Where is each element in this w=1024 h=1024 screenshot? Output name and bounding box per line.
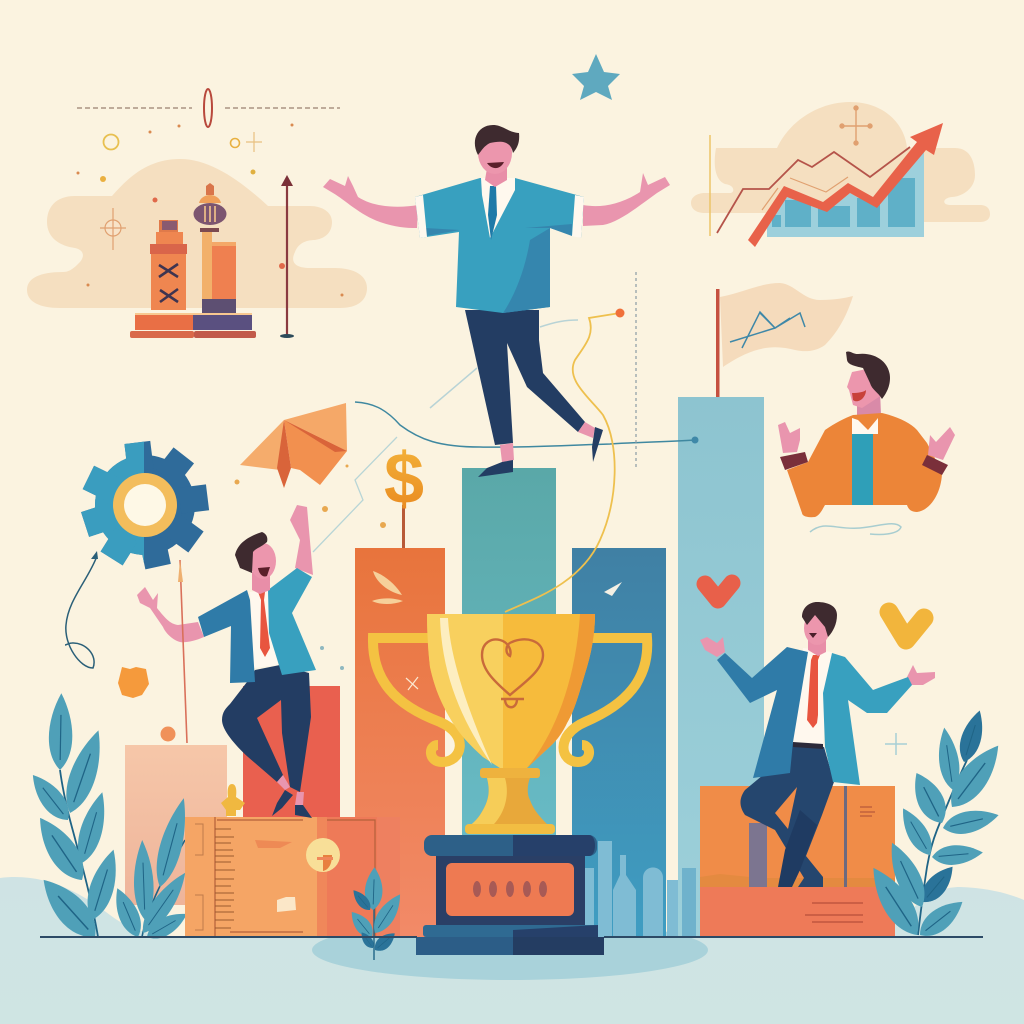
cloud backdrop [27, 159, 367, 308]
cuffs [780, 452, 948, 475]
panel: bar columns [125, 397, 764, 937]
leg gap [775, 787, 797, 829]
mouth [487, 162, 504, 168]
jacket left [198, 590, 255, 683]
tie [488, 186, 497, 240]
cup highlight [440, 618, 492, 765]
figure: right man [700, 602, 935, 887]
dashed line and ring [77, 107, 340, 109]
handles [373, 638, 460, 762]
box: right stack [700, 786, 895, 937]
head [478, 132, 512, 174]
bar: red [243, 686, 340, 821]
heart emblem [482, 639, 543, 707]
main arrow [748, 123, 943, 247]
crosshair [840, 106, 872, 145]
jacket right [268, 568, 316, 675]
bar marks [372, 571, 403, 604]
head [804, 611, 830, 645]
tie [258, 592, 270, 657]
raised arm [290, 505, 313, 575]
panel: chess towers [27, 89, 367, 338]
shirt shading [503, 224, 572, 313]
dots [76, 124, 344, 296]
star [572, 54, 620, 100]
plaque [446, 863, 574, 916]
hair [475, 125, 519, 155]
neck [252, 572, 270, 594]
badge small flower [160, 726, 176, 742]
vertical axis [709, 135, 711, 236]
jacket right [823, 653, 912, 785]
socks [277, 775, 304, 805]
gear [81, 441, 209, 569]
small sparkle [885, 733, 907, 755]
chart area [767, 150, 924, 237]
badge [118, 667, 149, 698]
legs [740, 743, 834, 887]
ground line [40, 936, 417, 938]
bar: orange [355, 548, 445, 937]
stem collar [480, 768, 540, 778]
pedestal top [424, 835, 597, 856]
hearts [705, 583, 924, 640]
jacket [787, 413, 942, 517]
inner shirt [852, 434, 873, 505]
cup [427, 614, 595, 768]
legs [222, 665, 311, 792]
hands [778, 422, 955, 460]
tie [807, 655, 820, 728]
hands [700, 637, 935, 685]
plant: left large [24, 693, 125, 947]
neck [857, 390, 881, 428]
bar: light blue [678, 397, 764, 937]
ground line right [604, 936, 983, 938]
thin trend lines [717, 147, 910, 233]
shoes [478, 427, 603, 477]
paper plane [240, 403, 347, 488]
shirt [793, 648, 832, 745]
base [135, 314, 193, 330]
target mark [100, 208, 126, 250]
shoes [272, 790, 312, 818]
stem [465, 778, 555, 832]
hair [846, 351, 890, 399]
squiggle [810, 524, 901, 534]
arms [323, 173, 670, 228]
cup shade [527, 614, 595, 768]
curved arrow under gear [65, 551, 98, 668]
figure: top man on teal bar [323, 125, 670, 477]
panel: growth chart [691, 102, 990, 247]
arrow [286, 182, 288, 335]
plant: small left [108, 795, 194, 945]
plant: right large [862, 708, 1009, 943]
back arm [137, 587, 204, 642]
legs [465, 310, 585, 445]
cuffs [415, 195, 584, 238]
skyline [585, 841, 696, 937]
plant: center small [346, 867, 407, 960]
pedestal lower [423, 925, 598, 937]
shirt [250, 590, 278, 668]
flow lines [313, 272, 698, 612]
box: left stack [185, 817, 400, 937]
neck [485, 168, 507, 187]
bar: teal [462, 468, 556, 868]
cloud backdrop [691, 102, 990, 222]
neck [808, 640, 826, 656]
ground shadow ellipse [312, 920, 708, 980]
chart bars [772, 178, 915, 227]
foot [465, 824, 555, 834]
left tower [159, 220, 178, 232]
dollar sign: $ [384, 439, 424, 519]
trophy [373, 614, 647, 955]
pedestal body [436, 856, 585, 925]
bar: peach [125, 745, 227, 905]
shirt [415, 178, 584, 313]
collar [481, 178, 515, 238]
collar [852, 418, 878, 434]
ground hill [0, 877, 1024, 1024]
scattered dots [234, 464, 386, 670]
head [250, 543, 276, 579]
socks [500, 422, 595, 462]
jacket left [717, 647, 808, 778]
hair [802, 602, 837, 637]
figure: left man [137, 505, 316, 818]
hair [235, 532, 267, 573]
mouth [258, 567, 270, 577]
flag [716, 283, 853, 397]
small cross ornament [221, 784, 245, 816]
head [847, 368, 882, 408]
bar: blue [572, 548, 666, 937]
figure: orange man [778, 351, 955, 517]
belt [793, 742, 823, 749]
mouth [852, 390, 866, 401]
mouth [809, 633, 817, 638]
right tower [202, 230, 212, 300]
thin pole [178, 560, 187, 743]
